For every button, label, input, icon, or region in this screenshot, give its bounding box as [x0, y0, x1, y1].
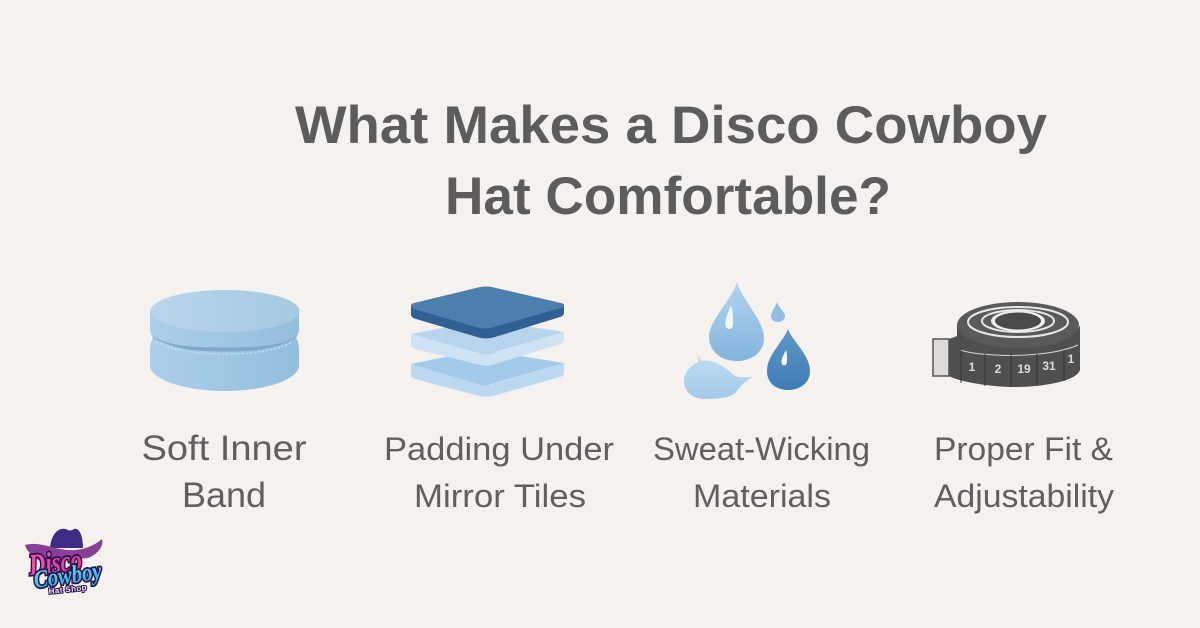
title: [295, 96, 1048, 226]
tape numbers: 19: [1017, 362, 1031, 376]
label: soft inner band: Soft Inner: [142, 429, 307, 468]
tape side: [949, 325, 1080, 387]
top layer: [411, 304, 564, 338]
logo text: Cowboy: [32, 558, 104, 594]
label: sweat-wicking materials: Sweat-Wicking: [653, 431, 870, 467]
logo text: [27, 544, 104, 594]
tape numbers: 31: [1042, 359, 1056, 373]
icon: soft inner band: [150, 290, 300, 391]
label: proper fit and adjustability: Proper Fit &: [934, 431, 1113, 467]
title: Hat Comfortable?: [445, 167, 891, 226]
splash blob: [684, 355, 753, 399]
icon: water drops: [684, 282, 810, 399]
title: What Makes a Disco Cowboy: [295, 96, 1048, 155]
label: sweat-wicking materials: [653, 431, 870, 514]
logo text: Disco: [27, 544, 83, 582]
label: soft inner band: Band: [182, 476, 266, 515]
logo hat crown: [50, 529, 83, 548]
tape tab: [933, 339, 949, 376]
label: proper fit and adjustability: [934, 431, 1114, 514]
icon: padding layers: [411, 286, 564, 397]
tape numbers: 1: [1068, 352, 1075, 366]
tape numbers: 2: [995, 362, 1002, 376]
label: padding under mirror tiles: [384, 431, 614, 514]
big drop: [709, 282, 764, 361]
lower layer: [411, 363, 564, 397]
tape ticks: [960, 345, 1078, 355]
label: padding under mirror tiles: Mirror Tiles: [414, 478, 586, 514]
small drop: [771, 302, 785, 322]
dark drop: [767, 329, 810, 390]
icon: measuring tape: [933, 302, 1080, 387]
label: soft inner band: [142, 429, 307, 515]
tape numbers: [969, 352, 1075, 376]
logo: Disco Cowboy Hat Shop: Hat Shop: [48, 583, 87, 596]
tape numbers: 1: [969, 360, 976, 374]
middle layer: [411, 332, 564, 366]
logo hat brim: [25, 539, 102, 562]
tape top: [957, 302, 1079, 348]
label: sweat-wicking materials: Materials: [693, 478, 831, 514]
label: padding under mirror tiles: Padding Under: [384, 431, 614, 467]
label: proper fit and adjustability: Adjustability: [934, 478, 1114, 514]
logo: Disco Cowboy Hat Shop: [25, 529, 104, 596]
